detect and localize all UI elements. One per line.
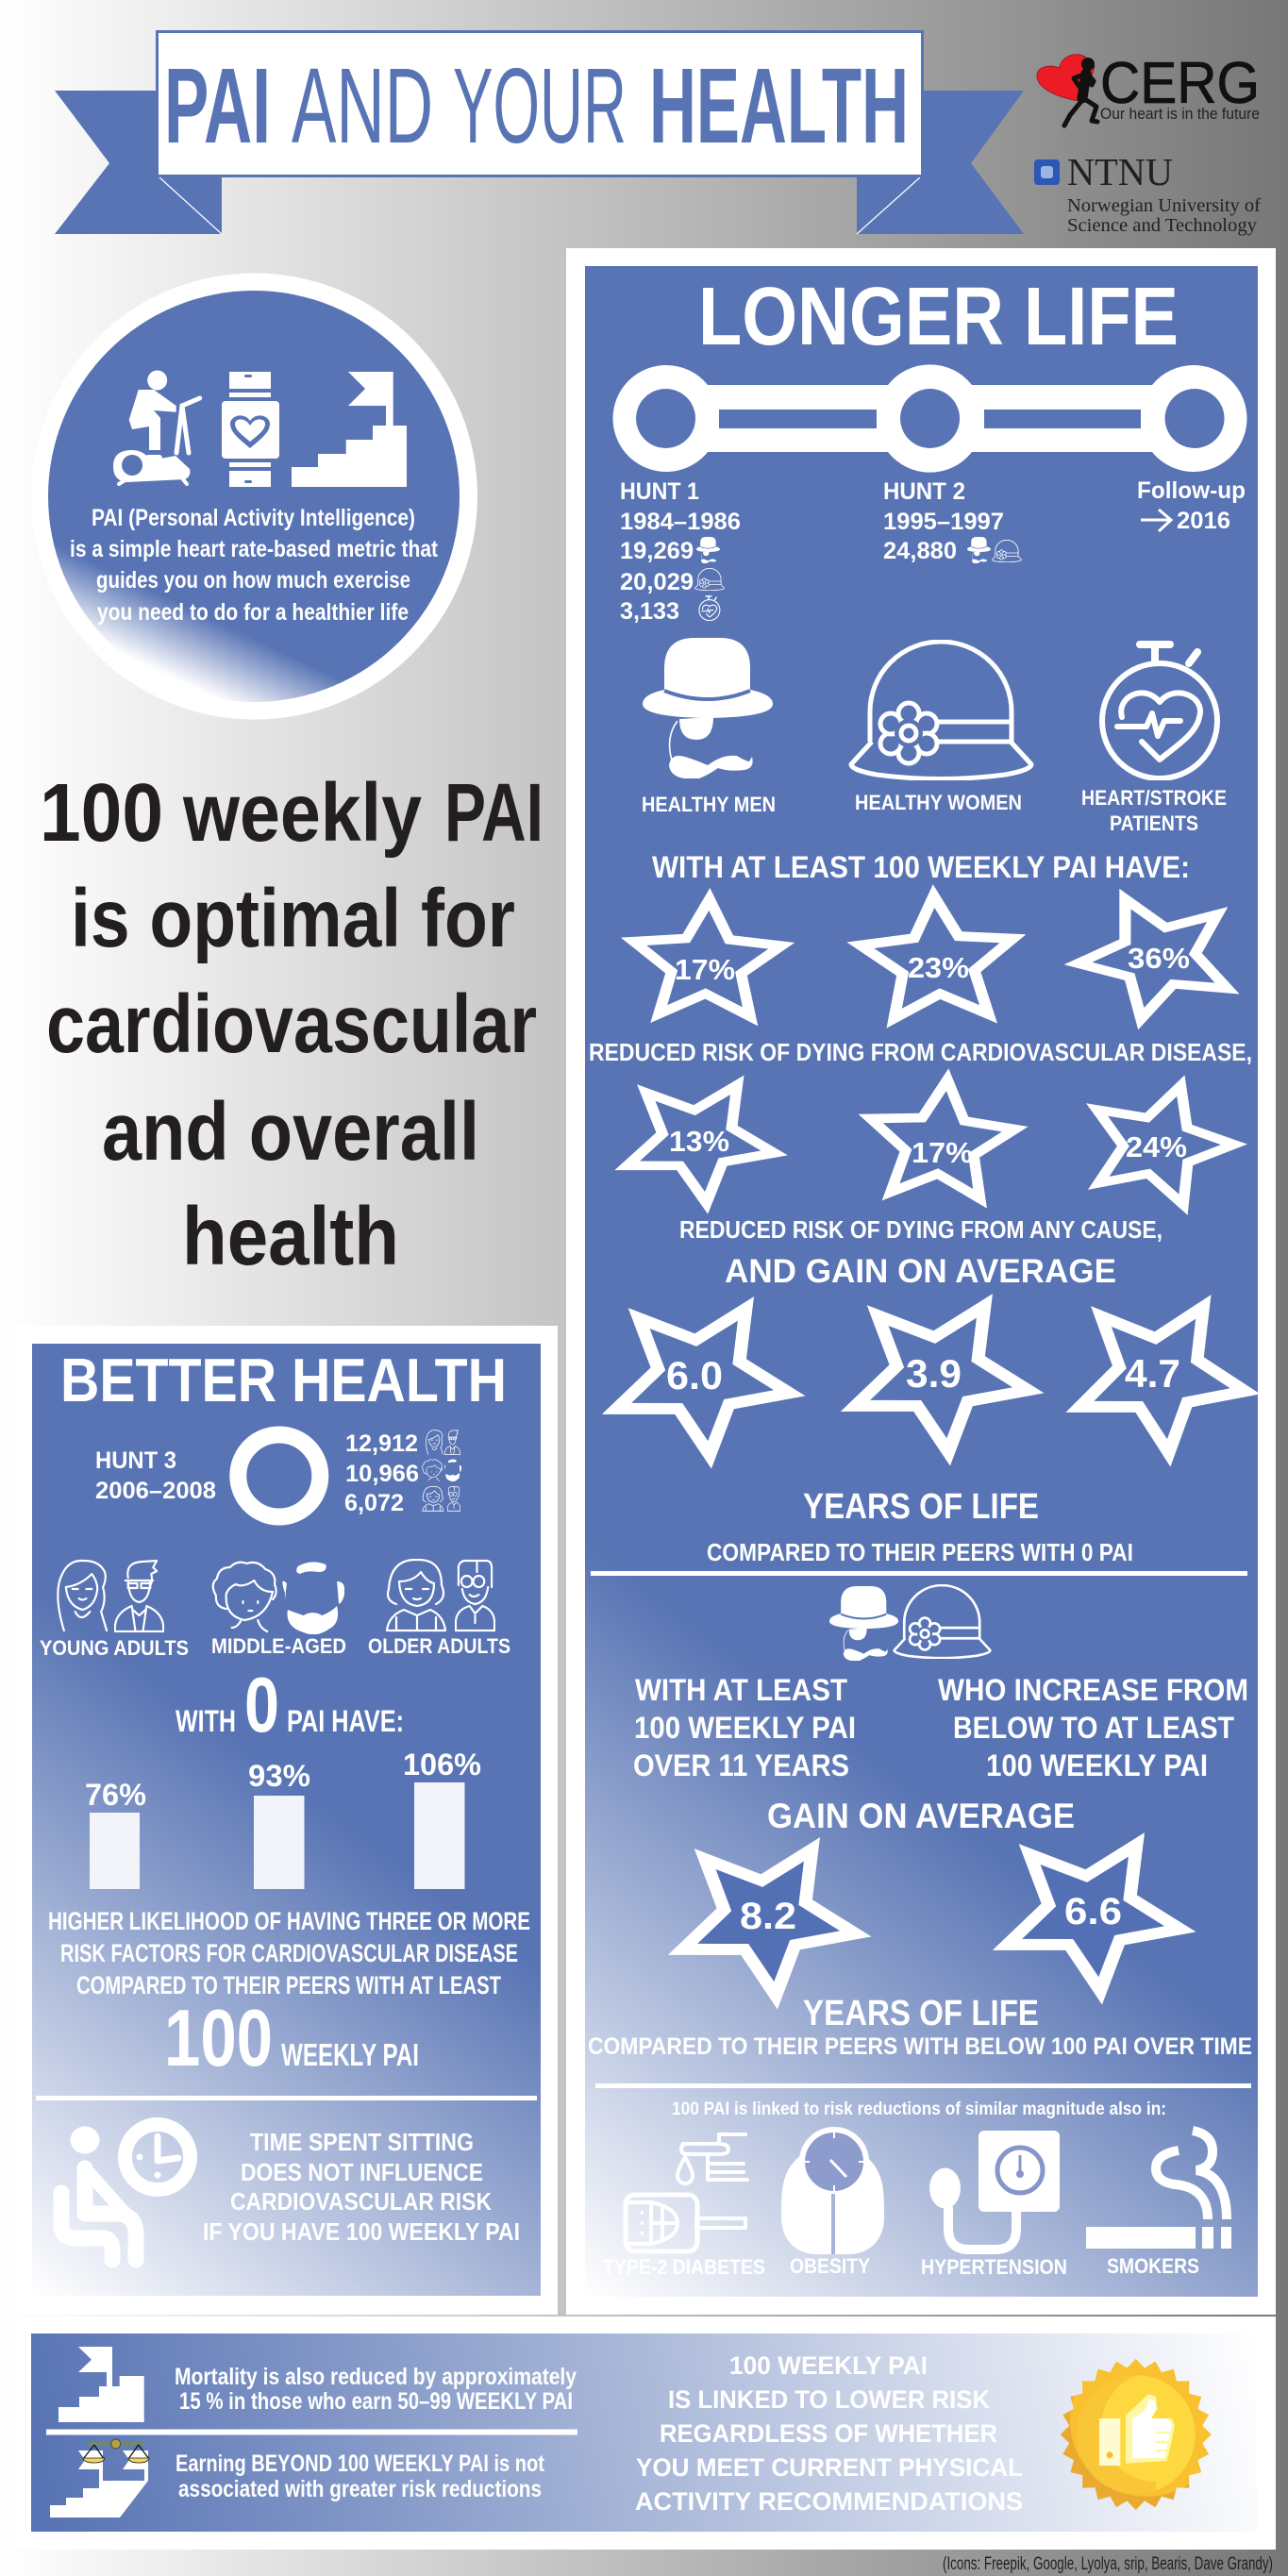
headline: 100 weekly PAI: weekly (182, 767, 422, 859)
text: who increase: 100 WEEKLY PAI (986, 1748, 1208, 1782)
caption: similar magnitude: 100 PAI is linked to risk reductions of similar magnitude also in: (672, 2099, 1166, 2119)
icon: exercise bike (113, 370, 200, 484)
title text: HEALTH (649, 46, 909, 165)
icon: stairs with flag (59, 2347, 144, 2422)
group: healthy men: HEALTHY MEN (642, 793, 776, 816)
headline: 100 weekly PAI (40, 767, 544, 1282)
bar chart: 93% (248, 1759, 310, 1793)
stars: any cause: 13% (669, 1125, 729, 1158)
title text: AND (292, 46, 433, 165)
subheading: gain on average: GAIN ON AVERAGE (767, 1797, 1075, 1835)
text: regardless of recommendations: 100 WEEKLY PAI (729, 2351, 928, 2380)
group: heart/stroke patients: PATIENTS (1110, 811, 1198, 835)
text: time spent sitting: DOES NOT INFLUENCE (241, 2158, 483, 2186)
cohort: HUNT 2 (883, 478, 1022, 564)
title text: PAI (164, 46, 271, 165)
PAI definition text: you need to do for a healthier life (97, 599, 409, 626)
group: healthy men (642, 638, 776, 816)
panel: PAI definition circle (31, 274, 477, 719)
cohort: HUNT 1: 20,029 (620, 569, 694, 595)
text: with at least: WITH AT LEAST (635, 1673, 847, 1707)
panel: longer life (566, 248, 1288, 2315)
ring (238, 1434, 320, 1517)
cohort: HUNT 3: HUNT 3 (95, 1447, 176, 1474)
group: healthy women: HEALTHY WOMEN (855, 791, 1022, 814)
title banner (55, 32, 1024, 234)
text: time spent sitting (203, 2128, 520, 2246)
headline: 100 weekly PAI: 100 (40, 767, 163, 859)
title text (164, 46, 909, 165)
ribbon tails (55, 91, 1024, 234)
PAI definition text: guides you on how much exercise (96, 567, 410, 594)
caption: higher likelihood (48, 1907, 530, 1999)
group: young adults (40, 1561, 189, 1660)
cohort: HUNT 1: 3,133 (620, 598, 679, 625)
text: regardless of recommendations: IS LINKED TO LOWER RISK (668, 2385, 990, 2414)
text: time spent sitting: CARDIOVASCULAR RISK (230, 2187, 492, 2216)
PAI definition text (70, 505, 439, 626)
group: older adults (368, 1560, 510, 1658)
caption: compared to peers: COMPARED TO THEIR PEERS WITH 0 PAI (707, 1538, 1133, 1566)
text: regardless of recommendations: ACTIVITY RECOMMENDATIONS (635, 2487, 1023, 2516)
callout: 100 weekly PAI: 100 (164, 1994, 273, 2083)
label row: TYPE-2 DIABETES (603, 2255, 765, 2279)
callout: 100 weekly PAI: WEEKLY PAI (281, 2037, 419, 2072)
icon: cigarette (1086, 2131, 1231, 2249)
text: regardless of recommendations: YOU MEET CURRENT PHYSICAL (636, 2453, 1023, 2482)
PAI definition text: is a simple heart rate-based metric that (70, 536, 439, 562)
subheading: WITH AT LEAST 100 WEEKLY PAI HAVE: (652, 850, 1190, 884)
logo: NTNU: NTNU (1067, 150, 1173, 193)
panel: bottom summary (13, 2317, 1276, 2550)
stars: years gained: 3.9 (906, 1351, 962, 1396)
cohort counts: 10,966 (345, 1461, 419, 1487)
cohort: HUNT 2: HUNT 2 (883, 478, 965, 505)
stars: years gained: 6.0 (666, 1353, 723, 1397)
icon: stairs with scales (50, 2439, 149, 2517)
stars: cardiovascular risk: 36% (1128, 942, 1190, 975)
label row: HYPERTENSION (921, 2255, 1067, 2279)
text: mortality: Mortality is also reduced by approximately (175, 2364, 577, 2390)
stars: sustained PAI: 8.2 (740, 1896, 796, 1937)
banner box (157, 32, 923, 176)
cohort: HUNT 1: 1984–1986 (620, 509, 741, 535)
stars: cardiovascular risk (617, 860, 1271, 1041)
text: beyond 100: Earning BEYOND 100 WEEKLY PAI is not (176, 2451, 545, 2477)
caption: years of life: YEARS OF LIFE (803, 1487, 1039, 1527)
group: older adults: OLDER ADULTS (368, 1634, 510, 1658)
stars: any cause (586, 1040, 1265, 1228)
subheading: with 0 PAI: WITH (176, 1704, 236, 1738)
stars: cardiovascular risk: 23% (908, 951, 969, 984)
text: mortality (175, 2364, 577, 2415)
group: heart/stroke patients: HEART/STROKE (1081, 786, 1227, 810)
stars: cardiovascular risk: 17% (675, 953, 735, 986)
text: time spent sitting: TIME SPENT SITTING (250, 2128, 474, 2156)
heading: longer life: LONGER LIFE (698, 271, 1179, 362)
headline: 100 weekly PAI: health (182, 1191, 399, 1282)
headline: 100 weekly PAI: is optimal for (71, 873, 515, 964)
group: middle-aged: MIDDLE-AGED (211, 1634, 346, 1658)
follow-up (1137, 477, 1246, 534)
cohort counts: 6,072 (344, 1490, 404, 1516)
cohort: HUNT 3 (95, 1447, 216, 1504)
text: with at least (633, 1673, 856, 1782)
cohort counts: 12,912 (345, 1430, 418, 1457)
subheading: with 0 PAI: PAI HAVE: (287, 1704, 404, 1738)
group: middle-aged (211, 1562, 346, 1658)
text: with at least: OVER 11 YEARS (633, 1748, 849, 1782)
logo: NTNU (1034, 150, 1261, 236)
cohort: HUNT 1 (620, 478, 741, 625)
icon: sitting person and clock (61, 2125, 191, 2260)
stars: years gained: 4.7 (1125, 1351, 1180, 1396)
stars: sustained PAI (634, 1789, 1233, 2026)
text: beyond 100: associated with greater risk reductions (178, 2476, 542, 2502)
icon: man and woman (829, 1585, 990, 1661)
stars: years gained (568, 1250, 1288, 1485)
text: who increase (938, 1673, 1248, 1782)
text: mortality: 15 % in those who earn 50–99 WEEKLY PAI (179, 2388, 573, 2415)
label row: SMOKERS (1107, 2254, 1199, 2278)
icon: thumbs-up badge (1061, 2359, 1212, 2510)
text: beyond 100 (176, 2451, 545, 2502)
bar chart: 106% (403, 1748, 481, 1781)
PAI definition text: PAI (Personal Activity Intelligence) (92, 505, 415, 531)
timeline (613, 364, 1246, 473)
headline: 100 weekly PAI: and overall (102, 1086, 479, 1178)
text: who increase: WHO INCREASE FROM (938, 1673, 1248, 1707)
text: regardless of recommendations (635, 2351, 1023, 2516)
cohort: HUNT 3: 2006–2008 (95, 1478, 216, 1504)
icon: heart rate watch (222, 372, 279, 487)
group: healthy women (851, 642, 1031, 814)
label row: OBESITY (790, 2254, 870, 2278)
caption: years of life: YEARS OF LIFE (803, 1994, 1039, 2033)
stars: any cause: 17% (912, 1136, 973, 1169)
cohort: HUNT 2: 1995–1997 (883, 509, 1004, 535)
subheading: with 0 PAI: 0 (244, 1661, 279, 1748)
group: heart/stroke patients (1081, 644, 1227, 835)
headline: 100 weekly PAI: cardiovascular (46, 979, 537, 1070)
follow-up: Follow-up (1137, 477, 1246, 504)
stars: sustained PAI: 6.6 (1064, 1891, 1122, 1932)
headline: 100 weekly PAI: PAI (444, 767, 544, 859)
text: who increase: BELOW TO AT LEAST (953, 1711, 1234, 1745)
cohort counts (344, 1430, 461, 1516)
bar chart (85, 1748, 481, 1889)
group: young adults: YOUNG ADULTS (40, 1636, 189, 1660)
panel: better health (14, 1326, 558, 2315)
caption: higher likelihood: COMPARED TO THEIR PEERS WITH AT LEAST (76, 1971, 501, 1999)
icon: NTNU square (1034, 159, 1060, 185)
heading: better health: BETTER HEALTH (60, 1346, 507, 1414)
caption: any cause: REDUCED RISK OF DYING FROM ANY CAUSE, (679, 1215, 1163, 1244)
text: time spent sitting: IF YOU HAVE 100 WEEKLY PAI (203, 2217, 520, 2246)
logo: CERG (1037, 51, 1260, 125)
caption: higher likelihood: RISK FACTORS FOR CARDIOVASCULAR DISEASE (60, 1939, 518, 1967)
logo: CERG: Our heart is in the future (1100, 105, 1260, 123)
cohort: HUNT 1: 19,269 (620, 538, 694, 564)
icon: heart and runner (1037, 55, 1097, 125)
follow-up: 2016 (1177, 508, 1230, 534)
caption: higher likelihood: HIGHER LIKELIHOOD OF HAVING THREE OR MORE (48, 1907, 530, 1935)
text: with at least: 100 WEEKLY PAI (634, 1711, 856, 1745)
cohort: HUNT 1: HUNT 1 (620, 478, 699, 505)
cohort: HUNT 2: 24,880 (883, 538, 957, 564)
callout: 100 weekly PAI (164, 1994, 419, 2083)
logo: NTNU: Science and Technology (1067, 215, 1257, 236)
subheading: gain on average: AND GAIN ON AVERAGE (725, 1253, 1116, 1290)
title text: YOUR (453, 46, 627, 165)
logo: NTNU: Norwegian University of (1067, 195, 1261, 216)
icon: blood pressure (929, 2131, 1060, 2250)
icon: stairs with flag (292, 372, 407, 487)
subheading: with 0 PAI (176, 1661, 404, 1748)
stars: any cause: 24% (1126, 1130, 1187, 1163)
label row (603, 2254, 1199, 2279)
icon: scale (781, 2130, 884, 2254)
bar chart: 76% (85, 1778, 146, 1812)
text: regardless of recommendations: REGARDLESS OF WHETHER (660, 2419, 997, 2448)
icon: diabetes (626, 2134, 747, 2251)
logo: CERG: CERG (1100, 51, 1260, 116)
